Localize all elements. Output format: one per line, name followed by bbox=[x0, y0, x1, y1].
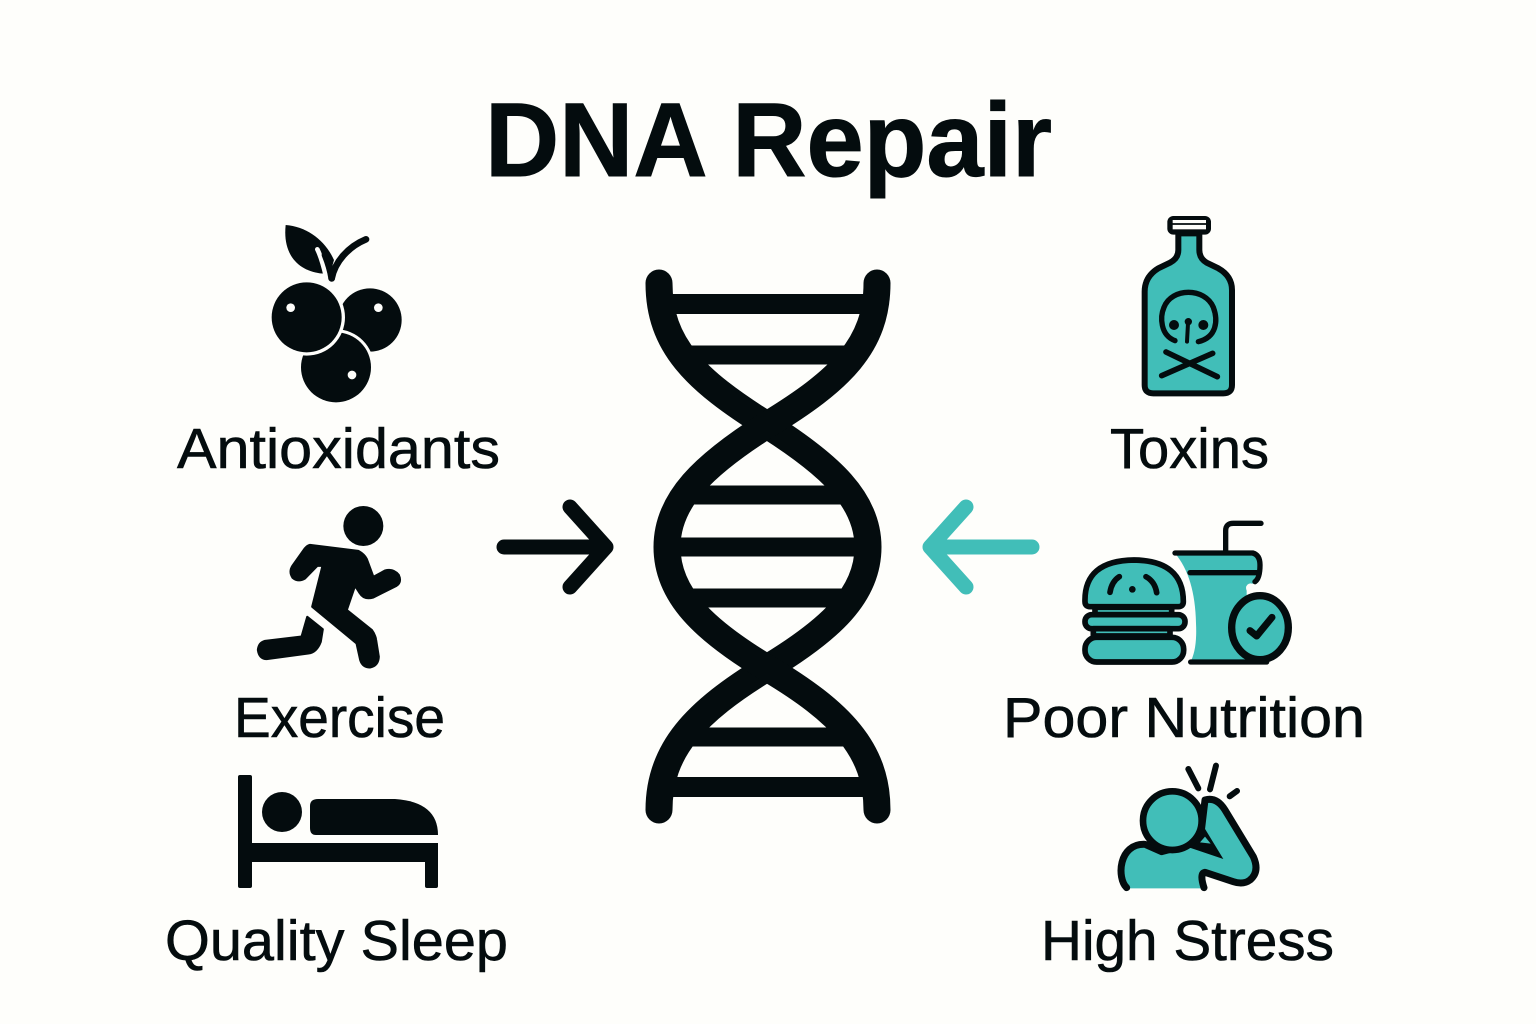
item: high stress bbox=[1041, 766, 1334, 973]
item: toxins bbox=[1110, 216, 1269, 481]
label: high stress: High Stress bbox=[1041, 909, 1334, 973]
item: exercise bbox=[234, 506, 445, 750]
base pair rungs bbox=[668, 304, 868, 787]
item: quality sleep bbox=[165, 775, 508, 973]
icon: berries bbox=[268, 225, 402, 405]
drink cup bbox=[1175, 523, 1288, 663]
helix strand one bbox=[659, 283, 868, 810]
arrow: harmful factors toward DNA bbox=[930, 507, 1032, 587]
icon: burger and drink bbox=[1085, 523, 1288, 663]
arrow: beneficial factors toward DNA bbox=[504, 507, 606, 587]
burger bbox=[1085, 560, 1185, 662]
label: antioxidants: Antioxidants bbox=[177, 417, 500, 481]
label: quality sleep: Quality Sleep bbox=[165, 909, 508, 973]
item: antioxidants bbox=[177, 225, 500, 481]
icon: bed bbox=[238, 775, 438, 888]
label: toxins: Toxins bbox=[1110, 417, 1269, 481]
helix strand two bbox=[667, 283, 877, 810]
item: poor nutrition bbox=[1003, 523, 1365, 750]
icon: stressed person bbox=[1121, 766, 1256, 888]
icon: poison bottle bbox=[1145, 216, 1232, 393]
label: poor nutrition: Poor Nutrition bbox=[1003, 686, 1365, 750]
DNA double helix bbox=[659, 283, 877, 810]
label: exercise: Exercise bbox=[234, 686, 445, 750]
icon: runner bbox=[258, 506, 400, 667]
title: DNA Repair bbox=[485, 82, 1052, 199]
